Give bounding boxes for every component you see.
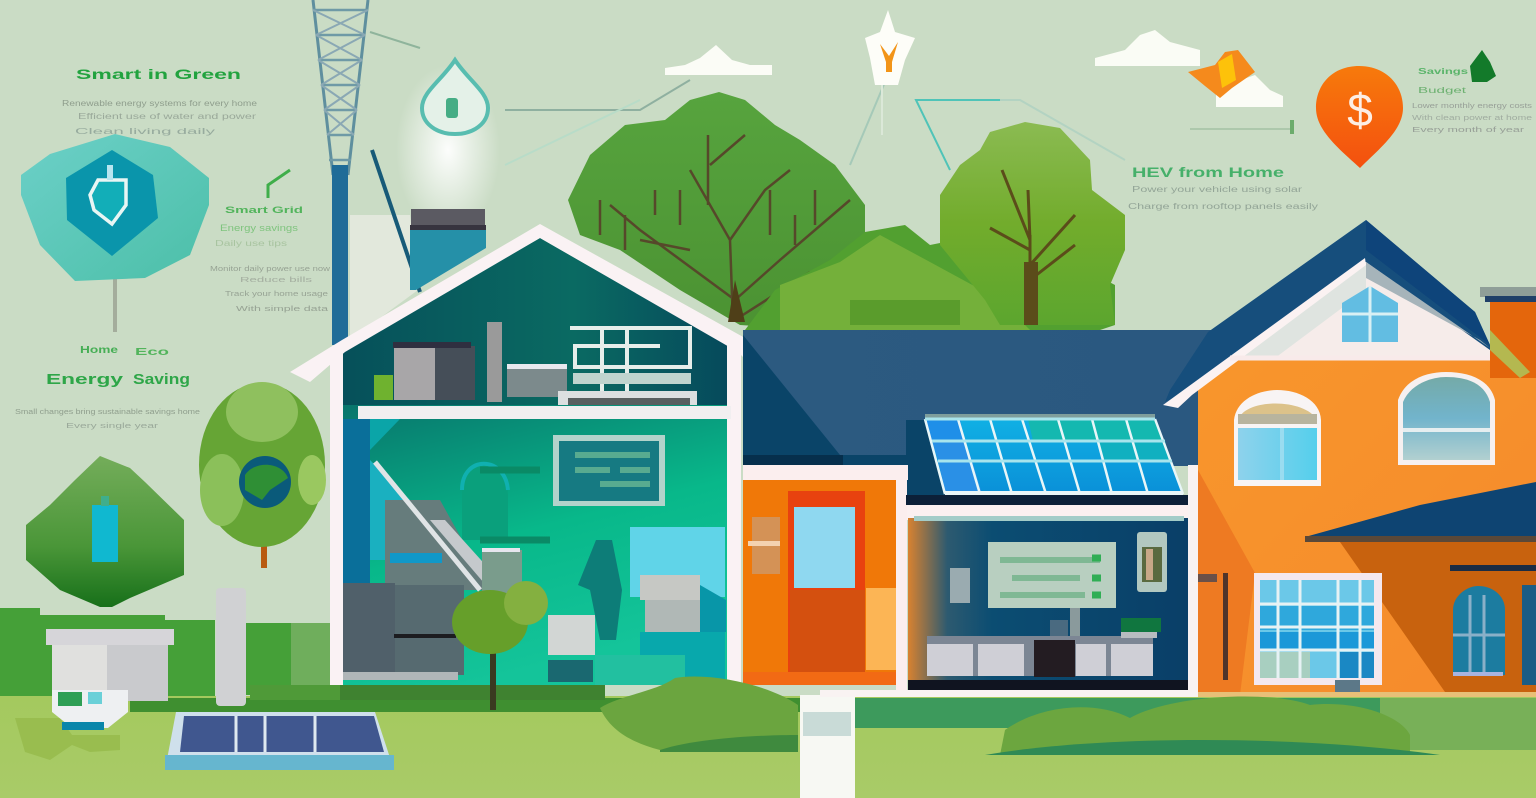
attic machinery [394, 344, 436, 400]
heading: energy saving: Every single year [66, 423, 159, 430]
icon: teal shield blob [21, 127, 215, 281]
text block: left middle: Energy savings [220, 223, 299, 233]
text block: top right: Budget [1418, 86, 1467, 95]
icon: green bottle badge [26, 456, 184, 607]
pole and lamp [1223, 573, 1228, 680]
text block: left middle: Track your home usage [225, 291, 328, 298]
icon: teal shield blob: Clean living daily [75, 127, 215, 136]
arched window 1 [1234, 390, 1321, 486]
chimney with glow [396, 65, 500, 290]
shrubs [600, 677, 1440, 755]
text block: center right: Charge from rooftop panels easily [1128, 202, 1318, 211]
large window [1254, 573, 1382, 685]
living room [820, 465, 1198, 697]
text block: center right: HEV from Home [1132, 164, 1284, 180]
main room [343, 405, 730, 685]
bush and tree two behind house [745, 122, 1125, 330]
icon: sun and speed marks [1188, 50, 1255, 98]
heading: energy saving: Small changes bring sustainable savings home [15, 409, 200, 416]
connector lines [115, 32, 1292, 332]
path [800, 695, 855, 798]
tree with globe [199, 382, 326, 568]
ground solar panel [165, 712, 394, 770]
house middle: navy roof and door [743, 330, 1213, 693]
icon: dollar pin: $ [1347, 84, 1373, 136]
heading: energy saving: Energy [46, 371, 124, 388]
heading: energy saving [15, 345, 200, 430]
icon: dollar pin [1316, 66, 1403, 168]
text block: top right: Every month of year [1412, 127, 1525, 134]
text block: center right [1128, 164, 1318, 211]
house right: orange section [1163, 220, 1536, 697]
gable cream [1235, 262, 1490, 358]
gable window [1342, 286, 1398, 342]
attic [343, 238, 727, 405]
shaded lower wall [1340, 542, 1536, 692]
arched window 2 [1398, 372, 1495, 465]
porch roof [1305, 482, 1536, 540]
arched door window [1453, 586, 1505, 675]
text block: left middle: Reduce bills [240, 277, 313, 284]
roof solar panel [906, 414, 1188, 505]
heading: energy saving: Saving [133, 371, 190, 388]
stairs [385, 500, 490, 590]
clouds [665, 30, 1283, 107]
text block: top right: With clean power at home [1412, 115, 1532, 122]
right blue area [630, 527, 725, 597]
text block: left middle: Daily use tips [215, 239, 287, 248]
text block: left middle: Smart Grid [225, 205, 303, 215]
right chimney [1490, 300, 1536, 378]
heading: energy saving: Home [80, 345, 119, 356]
plant [578, 540, 622, 640]
icon: top pin [865, 10, 915, 85]
thermostat [1137, 532, 1167, 592]
heading: top left: Renewable energy systems for every home [62, 99, 258, 108]
cabinet [927, 636, 1153, 676]
text block: top right [1412, 50, 1533, 134]
lattice tower [313, 0, 420, 345]
wall circle [462, 464, 508, 540]
wall screen [988, 542, 1116, 608]
hedge band behind houses [0, 608, 331, 700]
small white cabinet [548, 615, 595, 655]
text block: left middle [210, 170, 331, 313]
text block: top right: Savings [1418, 67, 1469, 76]
roof trim [290, 224, 775, 382]
text block: left middle: With simple data [236, 306, 328, 313]
heading: top left: Smart in Green [76, 66, 241, 82]
indoor tree [490, 650, 496, 710]
heading: energy saving: Eco [135, 347, 169, 358]
door wall panel [752, 517, 780, 574]
icon: water drop [422, 60, 488, 134]
heading: top left [62, 66, 258, 121]
lawn [0, 680, 1536, 798]
left dark blue strip [343, 419, 370, 619]
small grey post and utility box [46, 588, 246, 730]
text block: center right: Power your vehicle using solar [1132, 185, 1303, 194]
text block: left middle: Monitor daily power use now [210, 266, 331, 273]
navy gable roof [1165, 220, 1490, 402]
heading: top left: Efficient use of water and power [78, 112, 257, 121]
house left: teal section [290, 224, 775, 710]
wall monitor [553, 435, 665, 506]
text block: top right: Lower monthly energy costs [1412, 103, 1533, 110]
door [788, 491, 865, 675]
tree one behind house [568, 92, 865, 330]
